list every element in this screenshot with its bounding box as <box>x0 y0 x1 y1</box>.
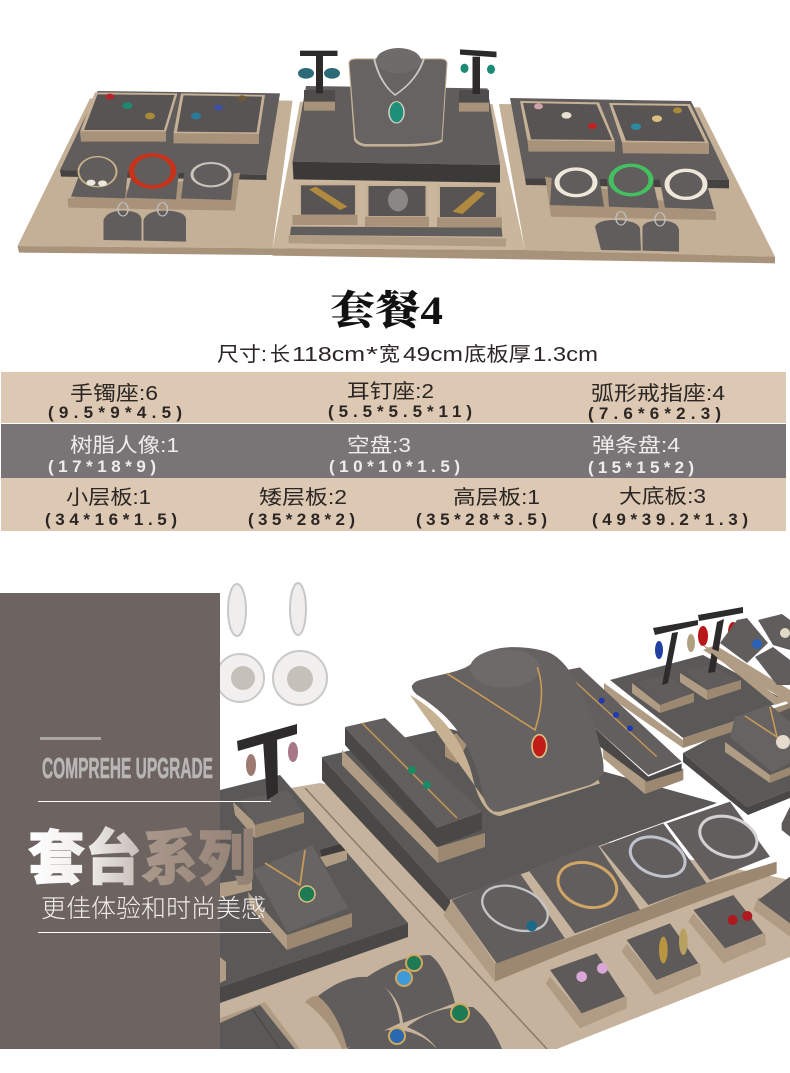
small earring stands <box>546 807 790 1028</box>
floor board <box>220 783 790 1049</box>
right ring holders <box>595 212 679 252</box>
left bracelet stands <box>68 155 240 211</box>
row 2 labels <box>48 434 694 477</box>
row 3 labels: (35*28*3.5) <box>416 510 547 529</box>
left base board <box>18 98 292 255</box>
centre riser block <box>292 86 500 183</box>
size subtitle: 49cm <box>403 344 463 366</box>
upper rule <box>38 801 271 802</box>
Chinese subtitle: 更佳体验和时尚美感 <box>41 895 266 923</box>
size subtitle: 1.3cm <box>533 344 598 366</box>
right bracelet stands <box>545 165 716 220</box>
bracelet stands <box>443 802 777 982</box>
large pearl earrings <box>216 583 327 705</box>
row 3 labels: 大底板:3 <box>619 485 706 508</box>
left bracelet holder <box>342 718 485 863</box>
title: 套餐4 <box>330 288 443 333</box>
size subtitle: 尺寸: <box>217 343 267 366</box>
size subtitle: 宽 <box>379 343 400 366</box>
row 1 labels: (5.5*5.5*11) <box>328 402 472 421</box>
centre base board <box>272 102 525 259</box>
top right lower plate <box>683 703 790 815</box>
right ring trays <box>520 101 709 154</box>
row 1 labels: 耳钉座:2 <box>347 380 434 403</box>
centre T stands with earrings <box>298 49 496 112</box>
top right platform <box>604 645 790 748</box>
row 3 labels: 小层板:1 <box>66 486 151 509</box>
right base board <box>499 104 775 263</box>
brown overlay panel <box>0 593 220 1049</box>
row 3 labels <box>45 485 748 529</box>
top product photo: jewelry display set <box>18 48 775 263</box>
left ring holders <box>104 203 186 242</box>
bottom product photo <box>216 583 790 1049</box>
row 2 labels: 弹条盘:4 <box>592 434 680 457</box>
size subtitle: * <box>366 344 378 366</box>
centre riser block <box>322 728 717 917</box>
short accent line <box>40 737 101 740</box>
left dark plate <box>60 91 280 180</box>
size subtitle: 底板厚 <box>464 343 531 366</box>
table row 2 background <box>1 424 786 478</box>
left dark plate <box>220 775 408 1003</box>
row 1 labels: (9.5*9*4.5) <box>48 403 182 422</box>
row 1 labels: 手镯座:6 <box>70 382 158 405</box>
right necklace stand <box>725 705 790 783</box>
top right T stands with earrings <box>632 607 743 713</box>
row 1 labels: 弧形戒指座:4 <box>591 382 725 405</box>
table row 3 background <box>1 478 786 531</box>
row 2 labels: (15*15*2) <box>588 458 694 477</box>
table row 1 background <box>1 372 786 423</box>
specification table <box>1 372 786 531</box>
row 3 labels: 高层板:1 <box>453 486 540 509</box>
row 3 labels: (49*39.2*1.3) <box>592 510 748 529</box>
English headline: COMPREHE UPGRADE <box>42 753 213 785</box>
necklace stand <box>248 845 352 950</box>
Chinese headline: 套台系列 <box>28 826 255 892</box>
lower rule <box>38 932 271 933</box>
left ring trays <box>80 92 265 144</box>
lower left tray <box>220 1002 300 1049</box>
small tan tray edges <box>220 844 347 983</box>
row 3 labels: 矮层板:2 <box>259 486 347 509</box>
row 3 labels: (35*28*2) <box>248 510 355 529</box>
ring holders <box>305 955 502 1049</box>
scene details in zoom coordinates <box>410 647 790 1028</box>
row 2 labels: (10*10*1.5) <box>329 457 460 476</box>
centre brooch trays <box>288 183 506 247</box>
size subtitle <box>217 343 598 366</box>
row 2 labels: 空盘:3 <box>347 434 411 457</box>
row 2 labels: 树脂人像:1 <box>70 434 179 457</box>
row 1 labels <box>48 380 725 423</box>
top right necklace stands <box>702 614 790 705</box>
row 2 labels: (17*18*9) <box>48 457 156 476</box>
centre necklace bust <box>348 48 448 147</box>
row 3 labels: (34*16*1.5) <box>45 510 177 529</box>
T stand with earrings <box>233 724 304 838</box>
central necklace bust <box>410 647 604 816</box>
size subtitle: 长 <box>270 343 290 366</box>
size subtitle: 118cm <box>292 344 365 366</box>
row 1 labels: (7.6*6*2.3) <box>588 404 721 423</box>
right bracelet holder <box>567 667 683 794</box>
right dark plate <box>510 98 729 188</box>
